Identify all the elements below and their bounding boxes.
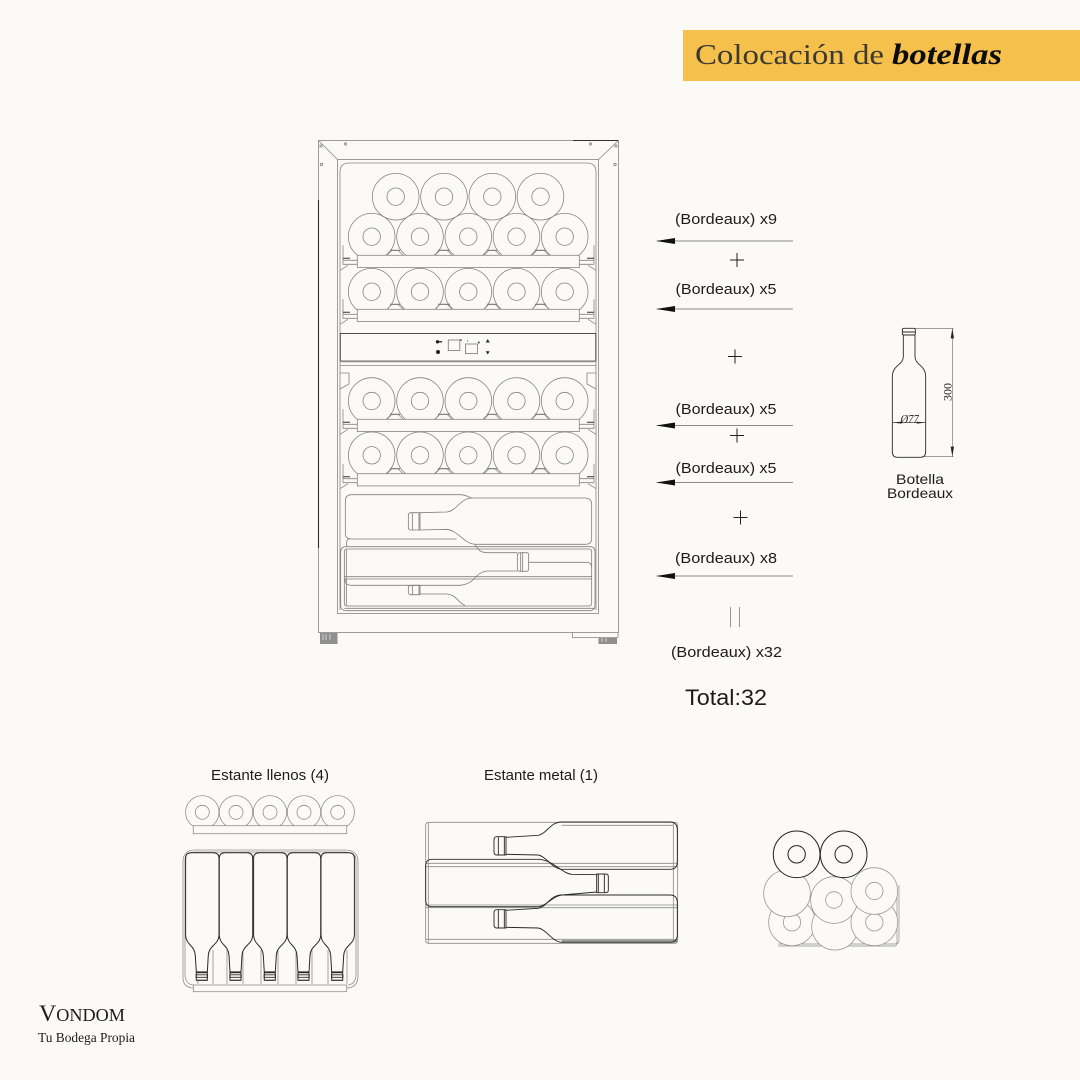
section: full shelf [183, 768, 358, 992]
shelf 2 with bottles [340, 268, 598, 324]
heading: full shelf: Estante llenos (4) [211, 768, 329, 784]
arrow 2 with label [656, 281, 793, 312]
plus 4 [734, 510, 748, 524]
wine cooler front view [318, 140, 618, 644]
bottom metal shelf with lying bottles [341, 495, 595, 611]
shelf 1 with bottles [340, 213, 598, 270]
arrow 4 with label [656, 460, 793, 486]
diameter dimension: Ø77 [899, 412, 920, 426]
bottle label [887, 471, 953, 501]
full shelf top view [183, 850, 358, 992]
tray [778, 885, 899, 946]
plus 3 [730, 428, 744, 442]
arrow 5 with label [656, 550, 793, 579]
bottle row 1 [372, 173, 564, 220]
control panel [340, 334, 596, 362]
shelf 4 with bottles [340, 432, 598, 489]
plus 2 [728, 350, 742, 364]
arrow 5 with label: (Bordeaux) x8 [675, 550, 777, 567]
arrow 3 with label: (Bordeaux) x5 [676, 401, 776, 418]
full shelf front view [186, 796, 354, 834]
arrow 3 with label [656, 401, 793, 428]
dimension lines [893, 328, 954, 457]
Bordeaux bottle dimension drawing [887, 328, 954, 501]
cabinet frame [318, 140, 618, 638]
feet [320, 633, 617, 644]
stacked bottles side view [764, 831, 899, 950]
arrow 1 with label: (Bordeaux) x9 [675, 211, 777, 228]
logo: VONDOM [39, 1001, 125, 1026]
arrow 2 with label: (Bordeaux) x5 [676, 281, 776, 298]
logo: Tu Bodega Propia [38, 1030, 135, 1045]
logo [38, 1001, 135, 1045]
shelf 3 with bottles [340, 373, 598, 434]
arrow 1 with label [656, 211, 793, 244]
title banner: Colocación de [695, 39, 884, 71]
title banner: botellas [892, 39, 1002, 71]
bottle label: Botella [896, 471, 944, 487]
equals sign [730, 607, 740, 627]
heading: metal shelf: Estante metal (1) [484, 768, 598, 784]
metal shelf drawing [426, 822, 678, 943]
subtotal: (Bordeaux) x32 [671, 644, 782, 661]
bottle outline [892, 328, 926, 457]
arrow 4 with label: (Bordeaux) x5 [676, 460, 776, 477]
bottle label: Bordeaux [887, 485, 953, 501]
section: metal shelf [426, 768, 678, 943]
plus 1 [730, 253, 744, 267]
title banner [683, 30, 1080, 81]
total: Total:32 [685, 685, 767, 710]
height dimension: 300 [940, 383, 954, 401]
